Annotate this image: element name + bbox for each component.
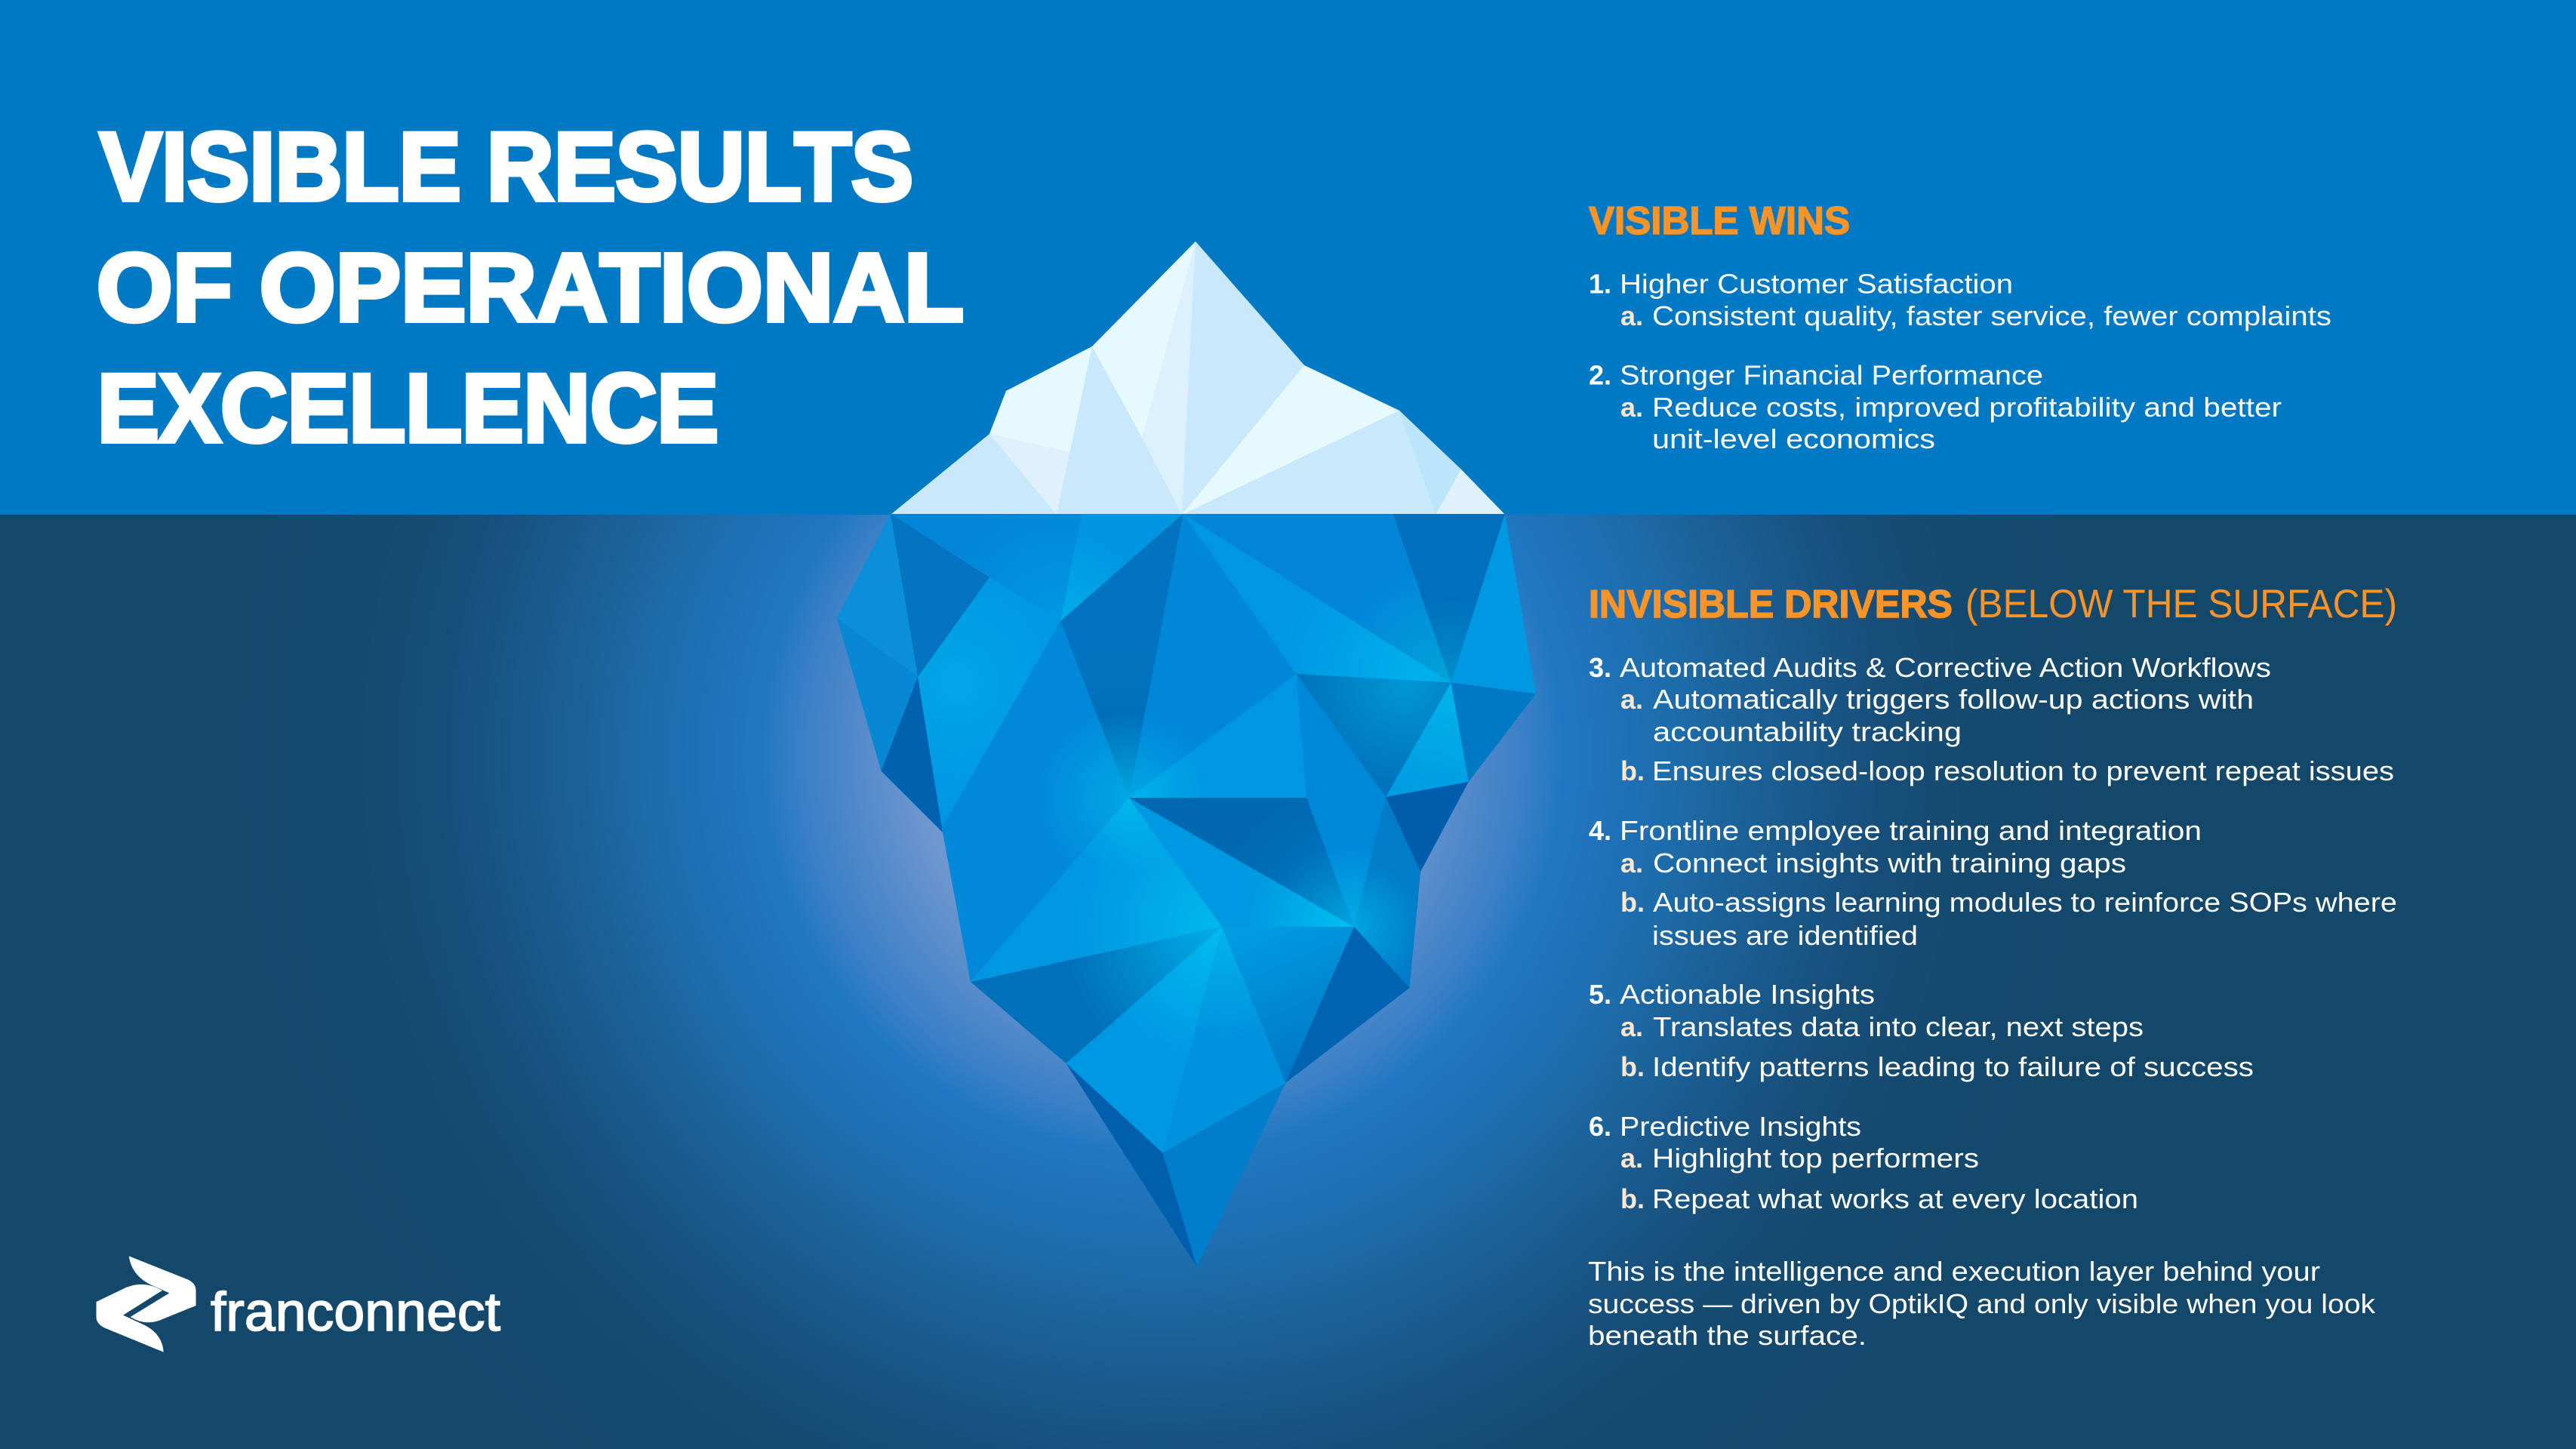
closing paragraph: This is the intelligence and execution layer behind your — [1588, 1256, 2320, 1287]
closing paragraph: success — driven by OptikIQ and only visible when you look — [1588, 1288, 2376, 1319]
list: visible wins items: 1. — [1589, 269, 1611, 299]
list item 4 — [1589, 815, 2397, 951]
iceberg tip above water — [891, 242, 1505, 515]
list item 6: a. — [1620, 1143, 1643, 1174]
list item 5: Actionable Insights — [1620, 979, 1875, 1010]
list item 6 — [1589, 1111, 2138, 1214]
list item 5: 5. — [1589, 979, 1611, 1010]
icon: franconnect mark — [97, 1256, 196, 1352]
title: EXCELLENCE — [97, 355, 719, 463]
list: visible wins items: Reduce costs, improved profitability and better — [1652, 392, 2282, 423]
list: visible wins items: Stronger Financial Performance — [1620, 359, 2043, 391]
list: visible wins items: Higher Customer Satisfaction — [1620, 269, 2013, 299]
title: VISIBLE RESULTS — [100, 113, 913, 221]
list: visible wins items: 2. — [1589, 359, 1611, 391]
list: visible wins items: Consistent quality, faster service, fewer complaints — [1652, 300, 2331, 331]
list: visible wins items: a. — [1620, 300, 1643, 331]
list item 5: a. — [1620, 1011, 1643, 1042]
wordmark: franconnect — [211, 1282, 500, 1343]
list item 4: issues are identified — [1652, 920, 1918, 951]
closing paragraph: beneath the surface. — [1588, 1320, 1867, 1351]
list item 4: Auto-assigns learning modules to reinforce SOPs where — [1653, 887, 2397, 918]
list item 6: Predictive Insights — [1620, 1111, 1861, 1142]
logo: franconnect — [97, 1256, 500, 1352]
iceberg illustration — [837, 242, 1536, 1267]
title: OF OPERATIONAL — [97, 234, 964, 342]
heading: visible wins: VISIBLE WINS — [1589, 199, 1850, 243]
closing paragraph — [1588, 1256, 2376, 1351]
list item 5: Translates data into clear, next steps — [1653, 1011, 2144, 1042]
list item 3: accountability tracking — [1653, 716, 1962, 747]
list item 5: Identify patterns leading to failure of success — [1652, 1051, 2254, 1082]
list item 4: 4. — [1589, 815, 1611, 846]
list item 3: Automated Audits & Corrective Action Workflows — [1620, 652, 2271, 683]
list item 3: a. — [1620, 684, 1643, 715]
title — [97, 113, 964, 463]
list item 3: 3. — [1589, 652, 1611, 683]
panel: sky background — [0, 0, 2576, 515]
list item 4: b. — [1620, 887, 1645, 918]
panel: underwater background with glow — [0, 515, 2576, 1449]
list item 6: 6. — [1589, 1111, 1611, 1142]
list item 3: b. — [1620, 755, 1645, 786]
list item 3: Automatically triggers follow-up actions with — [1653, 684, 2254, 715]
list item 4: Connect insights with training gaps — [1653, 848, 2126, 878]
list item 6: b. — [1620, 1183, 1645, 1214]
list item 4: Frontline employee training and integration — [1620, 815, 2202, 846]
list: visible wins items: a. — [1620, 392, 1643, 423]
list item 5: b. — [1620, 1051, 1645, 1082]
heading: invisible drivers: INVISIBLE DRIVERS — [1589, 583, 1953, 626]
heading: invisible drivers — [1589, 582, 2397, 626]
iceberg body below water — [837, 514, 1536, 1267]
list item 3 — [1589, 652, 2394, 786]
list: visible wins items: unit-level economics — [1652, 423, 1935, 454]
list item 6: Highlight top performers — [1652, 1143, 1979, 1174]
list item 6: Repeat what works at every location — [1652, 1183, 2138, 1214]
list item 5 — [1589, 979, 2254, 1082]
list item 4: a. — [1620, 848, 1643, 878]
list: visible wins items — [1589, 269, 2331, 454]
heading: invisible drivers: (BELOW THE SURFACE) — [1965, 582, 2397, 626]
list item 3: Ensures closed-loop resolution to prevent repeat issues — [1652, 755, 2394, 786]
